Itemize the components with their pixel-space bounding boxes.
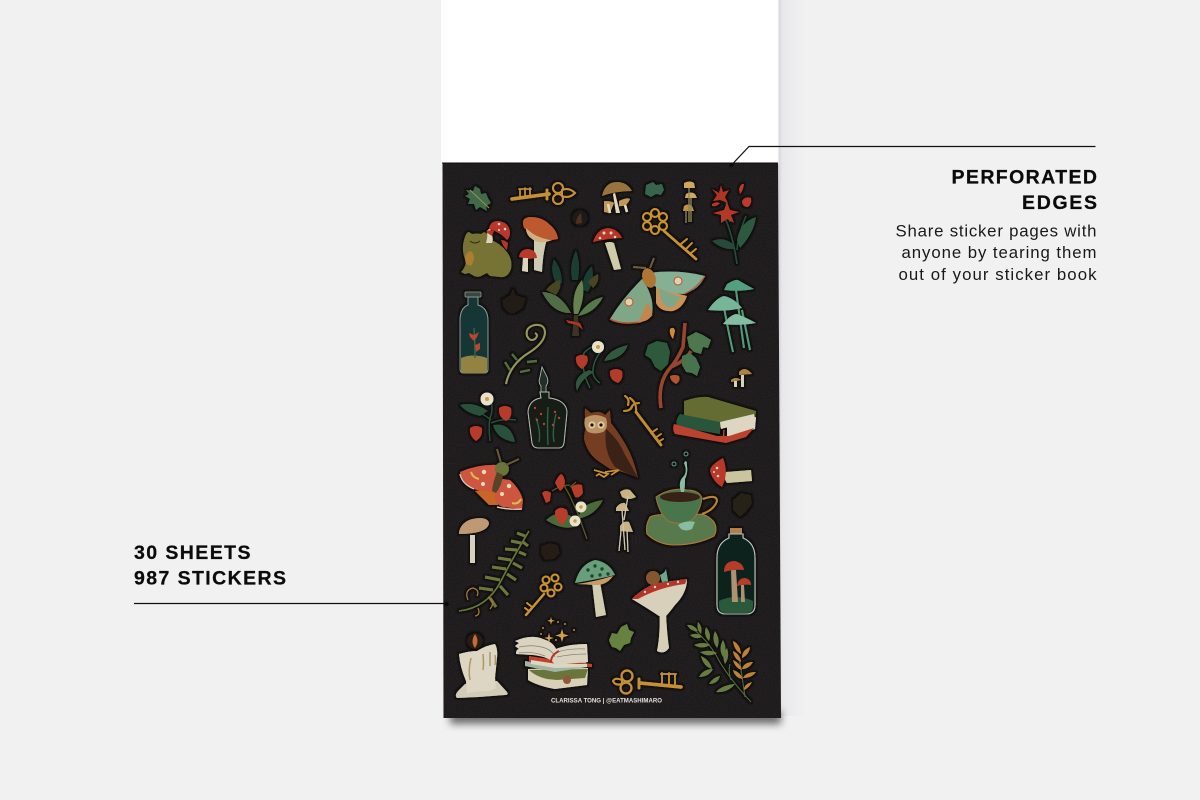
sticker: knot key — [525, 574, 562, 615]
sticker: strawberry bunch — [542, 474, 603, 539]
sticker: tall tiny mushrooms — [683, 182, 697, 223]
callout: sheets and stickers count — [134, 542, 449, 606]
sticker: gold key bottom — [613, 670, 681, 694]
sticker: tan mushroom — [459, 518, 489, 563]
sticker: owl — [584, 408, 638, 478]
callout: perforated edges: EDGES — [1022, 192, 1097, 214]
callout body text — [896, 222, 1097, 284]
sticker: frog with mushrooms — [461, 221, 512, 277]
sticker: leafy branch — [687, 622, 756, 702]
callout: perforated edges: PERFORATED — [952, 166, 1097, 188]
sticker: jar with mushrooms — [717, 528, 755, 614]
credit line: CLARISSA TONG | @EATMASHIMARO — [551, 698, 662, 704]
sticker: green leaf bottom — [609, 624, 634, 651]
sticker: bouquet — [542, 250, 603, 336]
sticker: ornate gold key — [624, 396, 663, 445]
white upper sheet — [441, 0, 778, 164]
sticker: oak leaf top left — [465, 186, 491, 211]
sticker: stack of books — [673, 397, 756, 443]
sticker: red moth — [460, 449, 523, 509]
sticker: faded moth — [502, 288, 526, 313]
sticker: mushroom cluster — [602, 182, 632, 213]
sticker: teal mushrooms — [708, 280, 756, 352]
sticker: red flower — [712, 184, 756, 264]
sticker: bottle with red flower — [460, 292, 488, 373]
callout: sheets and stickers count: 987 STICKERS — [134, 568, 286, 590]
sticker: strawberry left — [460, 392, 516, 442]
sticker: gold key horizontal — [512, 183, 575, 204]
black sticker page — [442, 163, 781, 718]
sticker: faded leaf — [572, 210, 588, 226]
sticker: fern curl — [505, 325, 545, 384]
sticker: faded moth small — [541, 543, 560, 560]
sticker: faded leaf right — [733, 493, 752, 517]
sticker: teacup with saucer — [646, 452, 717, 545]
callout body text: anyone by tearing them — [902, 243, 1096, 262]
callout: sheets and stickers count: 30 SHEETS — [134, 542, 250, 564]
sticker: strawberry plant — [576, 341, 628, 391]
sticker: books with open book — [515, 617, 592, 689]
book shadow — [450, 0, 806, 724]
sticker: amanita small — [593, 228, 622, 270]
sticker: small green leaf — [645, 182, 664, 197]
sticker: red mushrooms — [519, 217, 558, 272]
sticker: branch with oak leaves — [645, 323, 711, 408]
sticker: clear potion bottle — [528, 367, 567, 448]
sticker: green moth — [610, 258, 705, 323]
sticker: fern — [459, 531, 529, 616]
sticker: snail on mushroom — [632, 569, 687, 652]
callout: perforated edges — [729, 146, 1097, 214]
callout body text: Share sticker pages with — [896, 222, 1096, 240]
sticker: mushroom trio — [616, 489, 636, 552]
sticker: fallen red mushroom — [710, 458, 752, 487]
sticker: tiny mushrooms cluster — [731, 369, 752, 387]
sticker: snowflake key — [643, 209, 696, 259]
callout body text: out of your sticker book — [898, 265, 1097, 284]
stickers — [456, 182, 756, 702]
sticker: candle — [456, 633, 508, 698]
sticker: green mushroom — [575, 560, 615, 617]
